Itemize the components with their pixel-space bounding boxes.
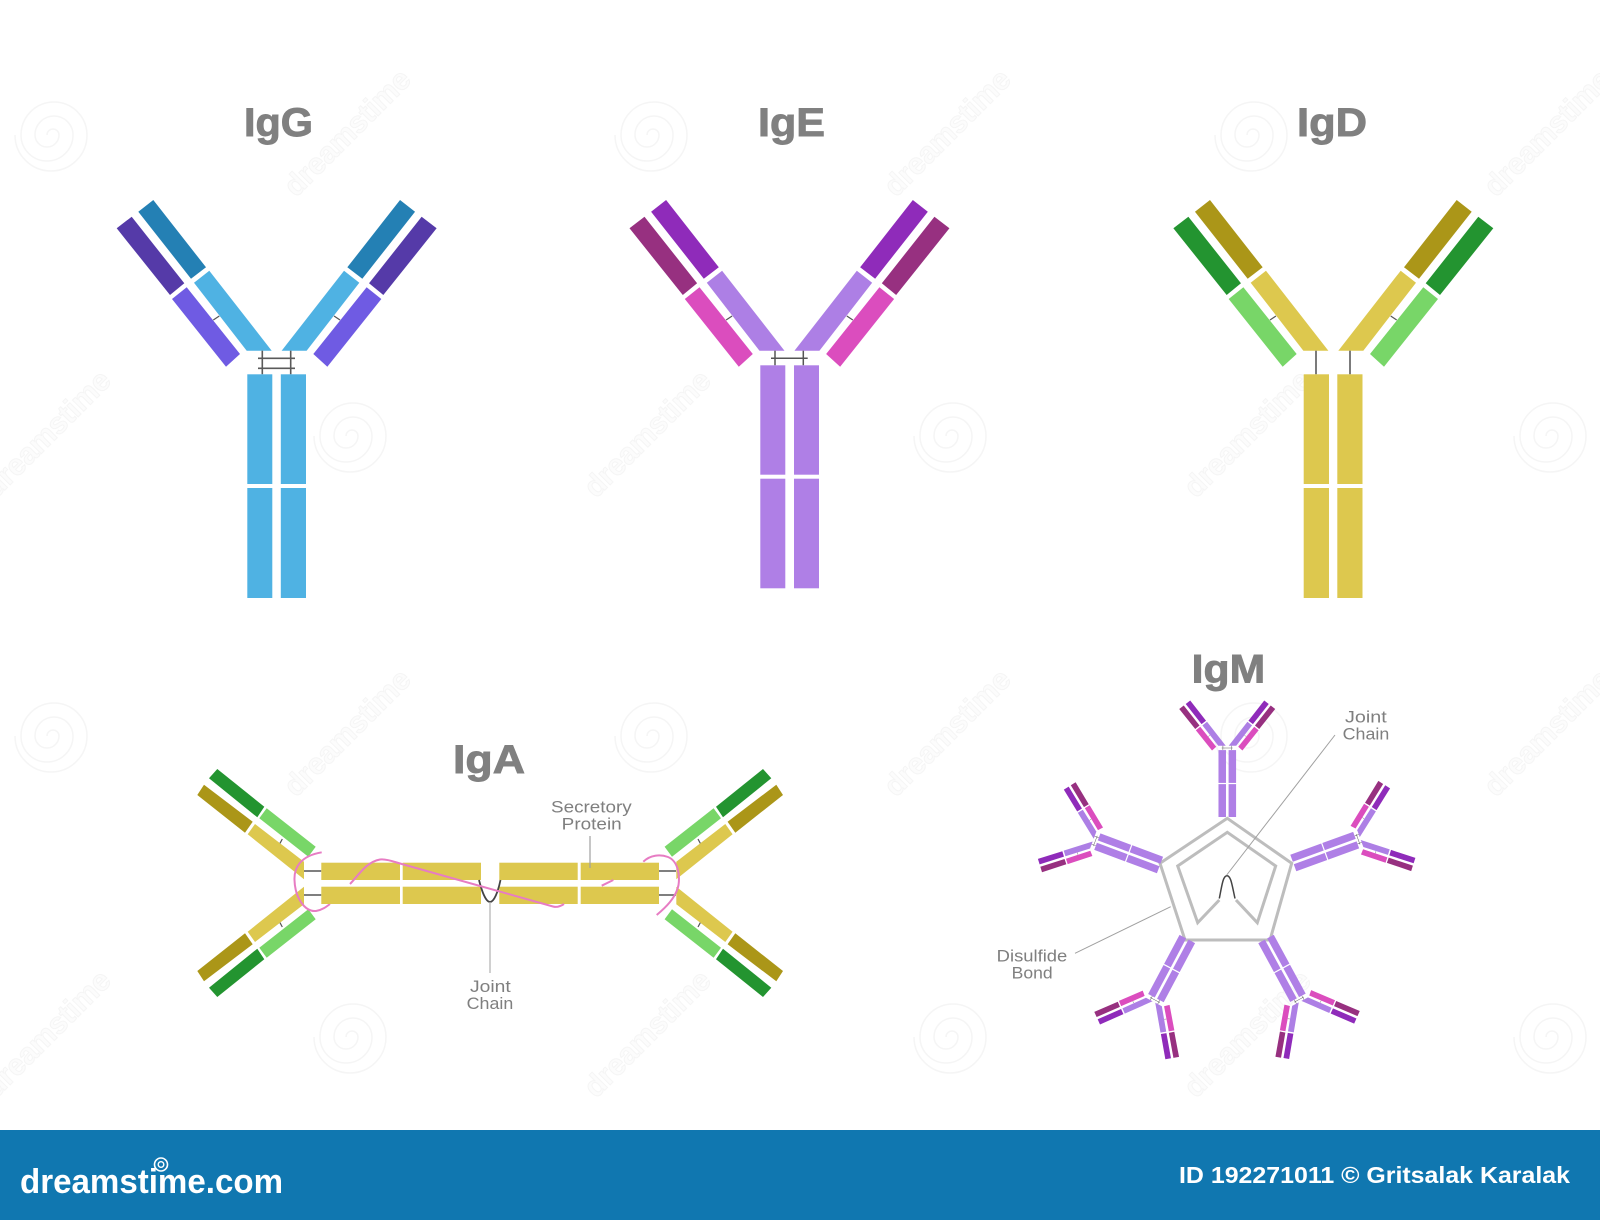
callout: IgA secretory protein: Protein — [562, 815, 622, 833]
callout: IgA joint chain: Joint — [470, 978, 511, 996]
callout: IgA joint chain — [467, 902, 513, 1013]
antibody: IgD — [1173, 200, 1493, 598]
watermark pattern: dreamstime — [578, 364, 718, 504]
watermark pattern: dreamstime — [578, 964, 718, 1104]
watermark pattern: dreamstime — [878, 663, 1018, 803]
heading: IgE: IgE — [758, 101, 825, 145]
watermark pattern: dreamstime — [278, 63, 418, 203]
footer bar — [0, 1130, 1600, 1220]
heading: IgM: IgM — [1192, 648, 1265, 692]
diagram: IgM pentamer — [1034, 701, 1419, 1064]
heading: IgG: IgG — [244, 101, 313, 145]
watermark pattern: dreamstime — [1178, 364, 1318, 504]
callout: IgA joint chain: Chain — [467, 995, 513, 1013]
secretory protein behind bars — [294, 852, 330, 911]
callout: IgM joint chain: Chain — [1343, 725, 1389, 743]
joint chain curve — [479, 880, 500, 902]
watermark pattern: dreamstime — [1178, 964, 1318, 1104]
watermark pattern: dreamstime — [278, 663, 418, 803]
callout: IgM disulfide bond — [997, 907, 1171, 982]
callout: IgM joint chain: Joint — [1345, 709, 1387, 727]
secretory protein strand — [350, 855, 679, 915]
heading: IgD: IgD — [1297, 101, 1367, 145]
antibody: IgE — [630, 200, 949, 588]
joint chain arch — [1219, 876, 1235, 898]
inner disulfide ring — [1178, 832, 1276, 923]
footer credit: ID 192271011 © Gritsalak Karalak — [1179, 1162, 1571, 1188]
callout: IgA secretory protein: Secretory — [551, 799, 633, 817]
antibody: IgG — [117, 200, 437, 598]
IgM monomer units — [1034, 701, 1419, 1064]
callout: IgA secretory protein — [551, 799, 633, 868]
outer disulfide pentagon — [1160, 818, 1292, 940]
footer logo: dreamstime.com — [20, 1163, 283, 1201]
watermark pattern: dreamstime — [878, 63, 1018, 203]
heading: IgA: IgA — [453, 738, 525, 782]
callout: IgM joint chain — [1227, 709, 1389, 875]
callout: IgM disulfide bond: Bond — [1012, 964, 1053, 982]
callout: IgM disulfide bond: Disulfide — [997, 948, 1067, 966]
antibody: IgA dimer — [197, 769, 783, 997]
